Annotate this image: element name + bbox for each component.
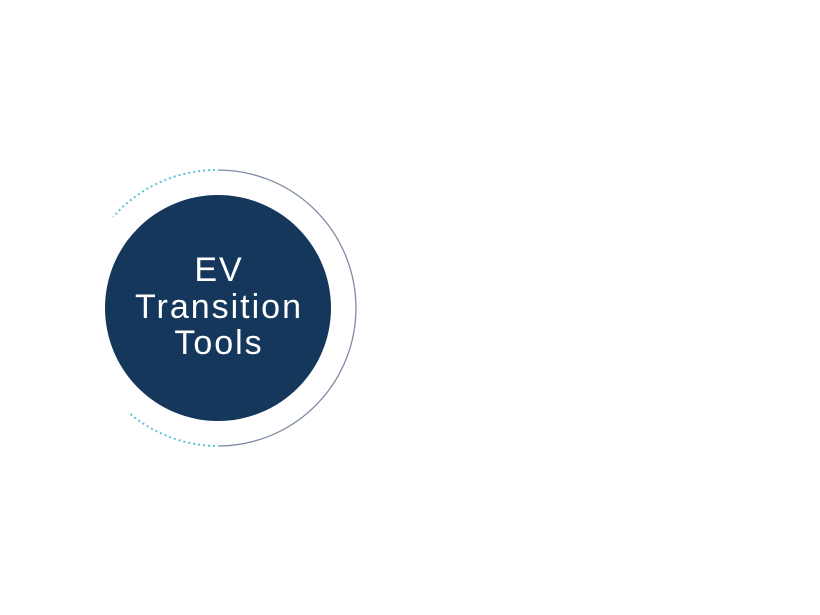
title text: Transition bbox=[135, 288, 303, 326]
outer arc: right solid bbox=[218, 170, 356, 446]
title text: EV bbox=[194, 251, 244, 289]
outer arc: bottom dotted bbox=[128, 412, 215, 446]
outer arc: top dotted bbox=[113, 170, 215, 217]
central circle bbox=[105, 195, 331, 421]
title text: Tools bbox=[174, 324, 264, 362]
title text bbox=[135, 251, 303, 362]
